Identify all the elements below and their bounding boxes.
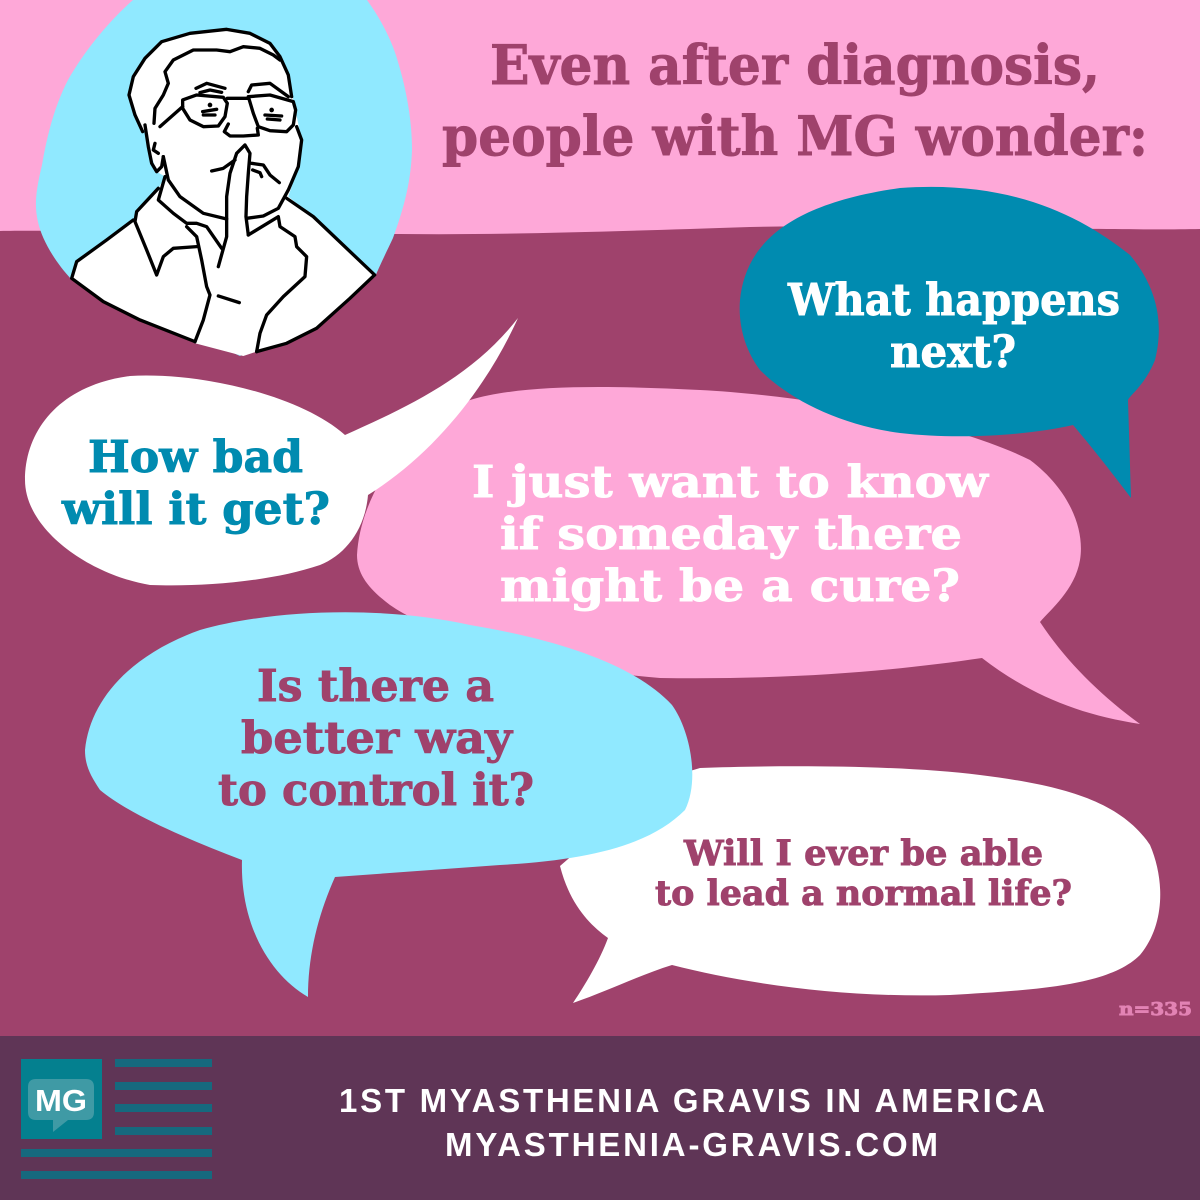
footer text: MYASTHENIA-GRAVIS.COM: [445, 1126, 938, 1163]
background: pink header band: [0, 0, 1200, 234]
pink speech bubble: cure: if someday there: [500, 509, 962, 560]
light blue speech bubble: better way: to control it?: [218, 765, 534, 816]
blue blob behind man: [36, 0, 412, 356]
teal speech bubble: what happens next: [740, 187, 1159, 498]
logo: MG flag: [21, 1059, 212, 1179]
white speech bubble: normal life: Will I ever be able: [683, 833, 1043, 874]
pink speech bubble: cure: I just want to know: [472, 457, 989, 508]
sample size note: n=335: [1119, 999, 1192, 1020]
footer text: [339, 1082, 1045, 1163]
logo: MG flag: MG: [35, 1083, 87, 1118]
teal speech bubble: what happens next: next?: [890, 327, 1016, 378]
title: [442, 33, 1148, 168]
title: people with MG wonder:: [442, 104, 1148, 168]
man pupils: [208, 103, 274, 112]
man silhouette: [72, 29, 375, 356]
pink speech bubble: cure: [357, 387, 1140, 724]
pink speech bubble: cure: might be a cure?: [500, 561, 960, 612]
white speech bubble: normal life: to lead a normal life?: [655, 873, 1072, 914]
white speech bubble: how bad: will it get?: [61, 484, 330, 535]
white speech bubble: how bad: [25, 318, 518, 585]
light blue speech bubble: better way: [85, 612, 692, 997]
footer bar: [0, 1036, 1200, 1200]
light blue speech bubble: better way: Is there a: [257, 661, 494, 712]
footer text: 1ST MYASTHENIA GRAVIS IN AMERICA: [339, 1082, 1045, 1119]
white speech bubble: how bad: How bad: [88, 432, 303, 483]
teal speech bubble: what happens next: What happens: [787, 275, 1120, 326]
title: Even after diagnosis,: [490, 33, 1100, 97]
man line work: [72, 29, 375, 352]
man drawing: [72, 29, 375, 356]
portrait: thinking man in blue blob: [36, 0, 412, 356]
light blue speech bubble: better way: better way: [241, 713, 514, 764]
white speech bubble: normal life: [560, 766, 1160, 1003]
